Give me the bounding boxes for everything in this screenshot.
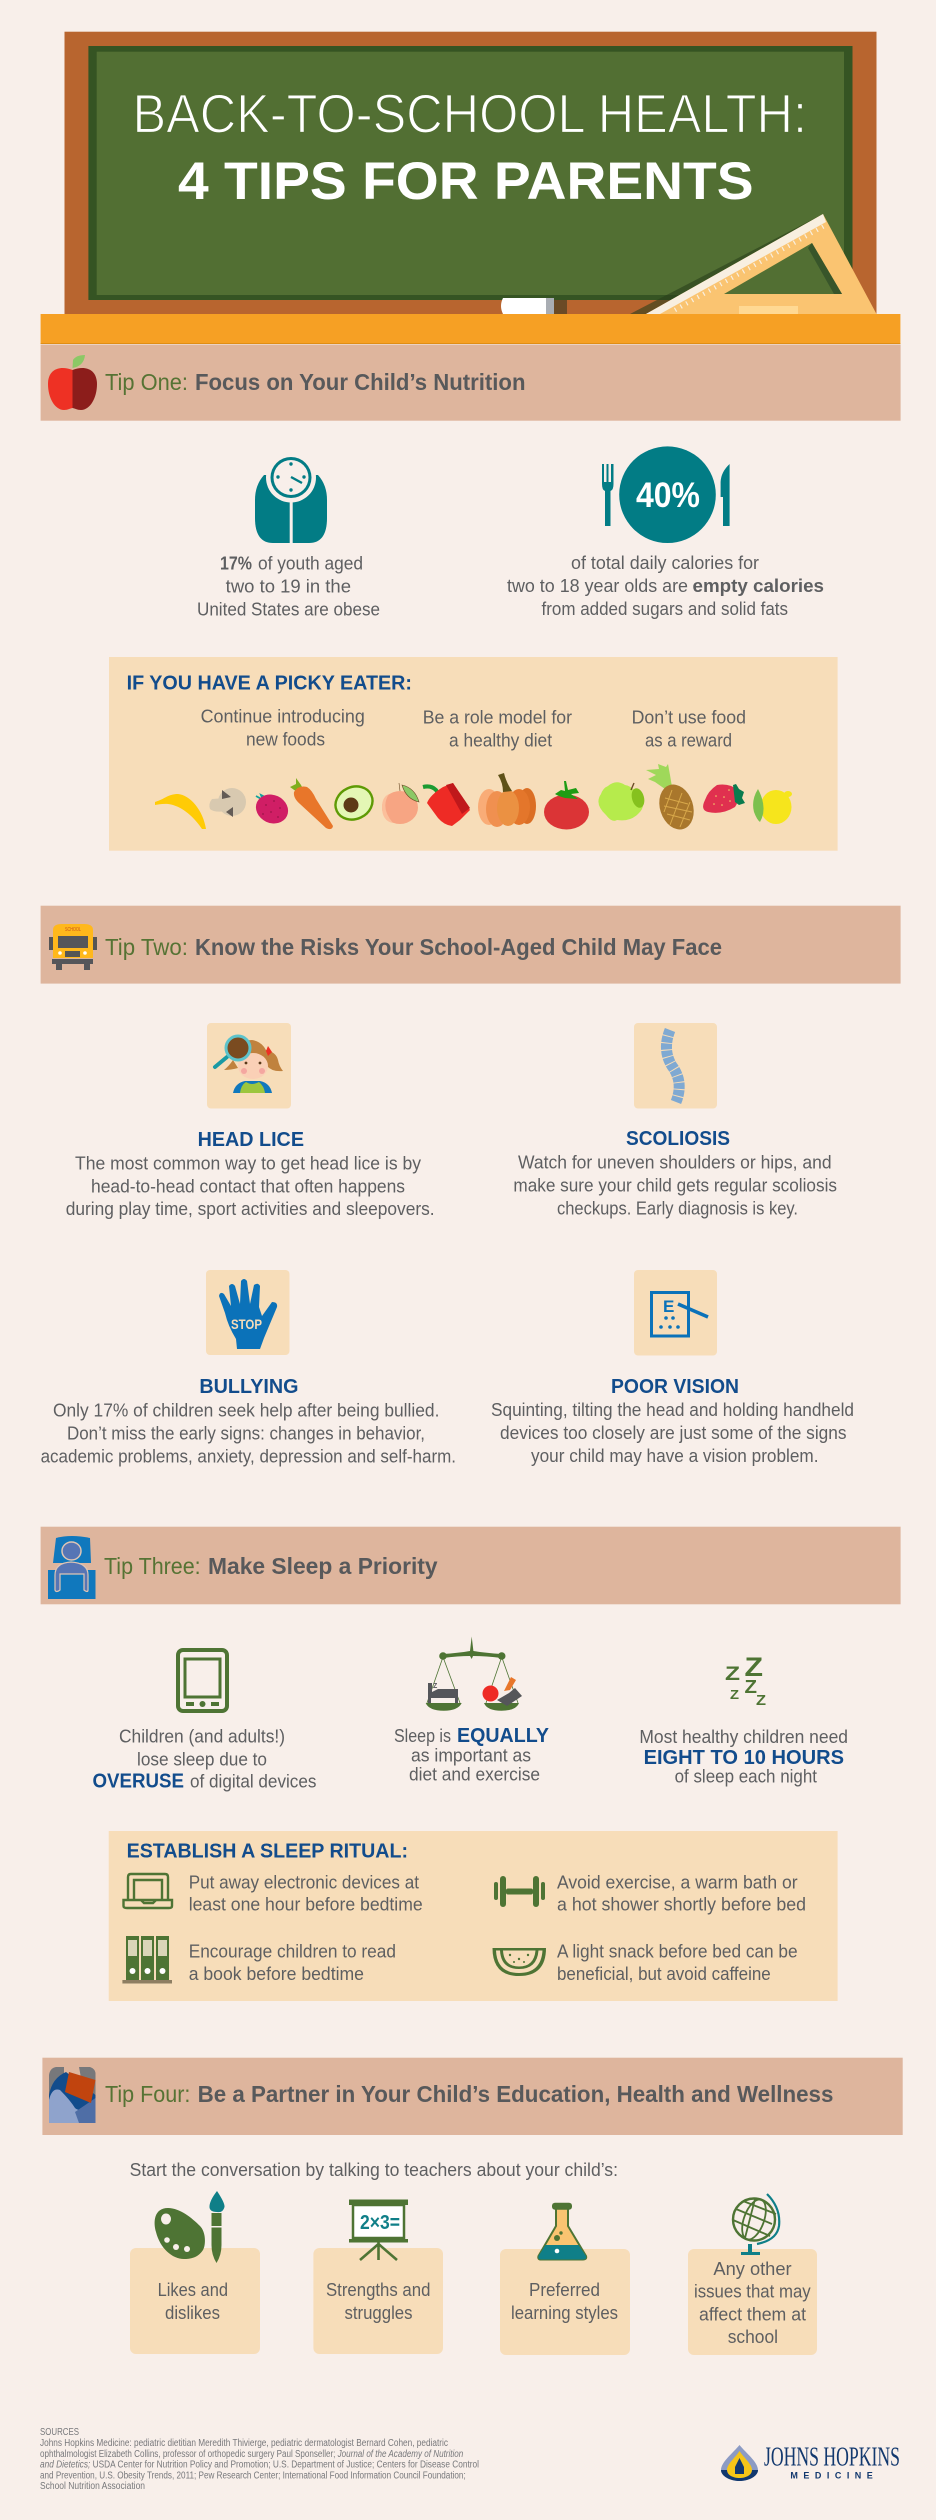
text: learning styles: learning styles xyxy=(511,2303,618,2323)
text: bullying xyxy=(41,1401,456,1466)
text: bullying: academic problems, anxiety, depression and self-harm. xyxy=(41,1446,456,1466)
card: scoliosis xyxy=(513,1023,837,1218)
text: head lice: during play time, sport activities and sleepovers. xyxy=(66,1199,435,1219)
icon: balance scale: Z xyxy=(433,1683,438,1690)
text: hours of sleep: EIGHT TO 10 HOURS xyxy=(644,1747,844,1769)
card: likes and dislikes xyxy=(130,2191,260,2354)
text: likes and dislikes: Likes and xyxy=(158,2280,228,2300)
icon: zzz: Z xyxy=(730,1687,739,1702)
icon: apple xyxy=(48,355,97,410)
sources: Johns Hopkins Medicine: pediatric dietitian Meredith Thivierge, pediatric dermatologist Bernard Cohen, pediatric xyxy=(40,2438,448,2449)
icon: balance scale xyxy=(426,1636,522,1711)
text: 40% of calories: from added sugars and solid fats xyxy=(542,599,788,619)
text: digital devices: lose sleep due to xyxy=(137,1750,267,1770)
heading: poor vision: POOR VISION xyxy=(611,1376,739,1398)
panel: tip two band xyxy=(41,906,901,984)
icon: stop hand xyxy=(206,1270,290,1355)
text: digital devices: Children (and adults!) xyxy=(119,1727,285,1747)
text: scoliosis: Watch for uneven shoulders or hips, and xyxy=(518,1153,832,1173)
card: head lice xyxy=(66,1023,435,1219)
text: poor vision xyxy=(491,1400,854,1466)
heading: bullying: BULLYING xyxy=(199,1376,298,1398)
sources xyxy=(40,2427,479,2492)
panel: sleep ritual xyxy=(109,1831,838,2001)
text: 40% of calories: of total daily calories for xyxy=(571,553,759,573)
icon: dumbbell xyxy=(494,1876,545,1907)
icon: weighing scale xyxy=(255,452,327,543)
text: 40% of calories: empty calories xyxy=(692,576,824,596)
heading: tip two: Know the Risks Your School-Aged Child May Face xyxy=(195,934,722,960)
logo: Johns Hopkins Medicine: MEDICINE xyxy=(790,2471,873,2481)
shelf xyxy=(41,314,900,344)
title: BACK-TO-SCHOOL HEALTH: xyxy=(132,84,807,145)
text: scoliosis xyxy=(513,1153,837,1218)
text: other issues: affect them at xyxy=(699,2304,806,2324)
text: 17% of youth: United States are obese xyxy=(197,599,380,619)
text: learning styles: Preferred xyxy=(529,2280,600,2300)
icon: globe xyxy=(733,2194,779,2255)
heading: tip four: Tip Four: xyxy=(105,2081,190,2107)
text: head lice xyxy=(66,1153,435,1219)
text: other issues: issues that may xyxy=(694,2282,811,2302)
text: strengths and struggles: Strengths and xyxy=(326,2280,430,2300)
icon: chalk xyxy=(501,298,567,314)
icon: eye chart xyxy=(634,1270,717,1356)
text: poor vision: your child may have a vision problem. xyxy=(531,1446,818,1466)
text: read a book xyxy=(189,1942,396,1984)
text: poor vision: Squinting, tilting the head and holding handheld xyxy=(491,1400,854,1420)
text: sleep equally xyxy=(394,1725,550,1785)
icon: plate with fork and knife: 40% xyxy=(636,476,700,515)
text: scoliosis: checkups. Early diagnosis is key. xyxy=(557,1198,798,1218)
intro text: start the conversation: Start the conversation by talking to teachers about your child’s: xyxy=(130,2160,618,2180)
text: learning styles xyxy=(511,2280,618,2323)
text: hours of sleep: of sleep each night xyxy=(675,1767,817,1787)
panel: picky eater xyxy=(109,657,838,851)
sources: and Prevention, U.S. Obesity Trends, 2011; Pew Research Center; International Food Information Council Foundation; xyxy=(40,2470,466,2481)
icon: laptop xyxy=(124,1874,172,1908)
title xyxy=(132,84,807,211)
heading: head lice: HEAD LICE xyxy=(198,1129,304,1151)
text: sleep equally: diet and exercise xyxy=(409,1765,540,1785)
stat: empty calories xyxy=(507,446,824,619)
text: head lice: The most common way to get head lice is by xyxy=(75,1153,421,1173)
text: sleep equally: Sleep is xyxy=(394,1726,451,1746)
heading: tip three: Tip Three: xyxy=(104,1553,201,1579)
tip: introducing foods: new foods xyxy=(246,730,325,750)
heading: scoliosis: SCOLIOSIS xyxy=(626,1128,730,1150)
icon: school bus xyxy=(49,924,97,970)
panel: tip four band xyxy=(42,2058,903,2135)
icon: plate with fork and knife xyxy=(602,446,730,543)
text: electronic devices xyxy=(189,1872,423,1915)
icon: presentation board: 2×3= xyxy=(360,2212,400,2234)
icon: zzz xyxy=(725,1652,766,1709)
title: 4 TIPS FOR PARENTS xyxy=(178,152,754,211)
sources: SOURCES xyxy=(40,2427,79,2438)
card: other issues xyxy=(688,2194,817,2355)
text: likes and dislikes: dislikes xyxy=(165,2303,220,2323)
text: 17% of youth: two to 19 in the xyxy=(226,577,351,597)
heading: tip one: Focus on Your Child’s Nutrition xyxy=(195,369,526,395)
logo: Johns Hopkins Medicine xyxy=(721,2442,900,2481)
heading: picky eater: IF YOU HAVE A PICKY EATER: xyxy=(127,672,412,694)
tip: role model xyxy=(423,708,572,751)
text: digital devices: OVERUSE xyxy=(92,1770,184,1792)
icons: row of fruit and vegetables xyxy=(155,764,792,834)
text: avoid exercise: a hot shower shortly before bed xyxy=(557,1895,806,1915)
text: strengths and struggles xyxy=(326,2280,430,2323)
panel: tip three band xyxy=(41,1527,901,1604)
icon: backpack xyxy=(49,2067,96,2123)
heading: tip two: Tip Two: xyxy=(105,934,188,960)
stat: hours of sleep xyxy=(639,1652,848,1787)
icon: shield xyxy=(721,2445,758,2481)
card: strengths and struggles xyxy=(313,2200,443,2354)
text: light snack xyxy=(557,1942,798,1984)
stat: obesity xyxy=(197,452,380,619)
icon: books xyxy=(122,1936,172,1984)
sources: ophthalmologist Elizabeth Collins, professor of orthopedic surgery Paul Sponseller; Journal of the Academy of Nutrition xyxy=(40,2449,464,2460)
text: avoid exercise: Avoid exercise, a warm bath or xyxy=(557,1872,798,1892)
text: read a book: a book before bedtime xyxy=(189,1964,364,1984)
tip: role model: a healthy diet xyxy=(449,731,552,751)
icon: school bus: SCHOOL xyxy=(65,927,81,933)
chalkboard header xyxy=(64,32,876,314)
text: light snack: beneficial, but avoid caffeine xyxy=(557,1964,771,1984)
text: hours of sleep xyxy=(639,1727,848,1787)
stat: sleep balance xyxy=(394,1636,550,1785)
text: head lice: head-to-head contact that often happens xyxy=(91,1176,405,1196)
icon: palette and brush xyxy=(155,2191,225,2263)
panel: tip one band xyxy=(41,344,901,421)
icon: flask xyxy=(538,2203,586,2260)
text: bullying: Don’t miss the early signs: changes in behavior, xyxy=(67,1424,425,1444)
text: likes and dislikes xyxy=(158,2280,228,2323)
text: sleep equally: as important as xyxy=(411,1746,531,1766)
card: bullying xyxy=(41,1270,456,1466)
text: other issues: Any other xyxy=(713,2259,792,2279)
text: scoliosis: make sure your child gets regular scoliosis xyxy=(513,1176,837,1196)
sources: School Nutrition Association xyxy=(40,2481,145,2492)
text: sleep equally: EQUALLY xyxy=(457,1725,550,1747)
heading: tip four: Be a Partner in Your Child’s Education, Health and Wellness xyxy=(198,2081,833,2107)
tip: food reward: as a reward xyxy=(645,731,732,751)
text: 17% of youth: of youth aged xyxy=(258,553,363,573)
icon: zzz: Z xyxy=(725,1664,741,1685)
icon: stop hand: STOP xyxy=(231,1316,262,1332)
text: electronic devices: Put away electronic devices at xyxy=(189,1872,419,1892)
icon: tablet xyxy=(178,1650,227,1711)
tip: food reward: Don’t use food xyxy=(632,708,746,728)
tip: introducing foods: Continue introducing xyxy=(201,707,365,727)
tip: food reward xyxy=(632,708,746,751)
icon: spine xyxy=(634,1023,717,1108)
icon: zzz: Z xyxy=(744,1652,763,1682)
heading: tip one: Tip One: xyxy=(105,369,188,395)
icon: zzz: Z xyxy=(744,1677,757,1697)
text: 40% of calories xyxy=(507,553,824,619)
heading: sleep ritual: ESTABLISH A SLEEP RITUAL: xyxy=(127,1841,408,1863)
tip: introducing foods xyxy=(201,707,365,750)
text: light snack: A light snack before bed can be xyxy=(557,1942,798,1962)
icon: eye chart: E xyxy=(663,1297,674,1316)
stat: digital devices xyxy=(92,1650,316,1792)
text: 17% of youth xyxy=(197,553,380,619)
text: bullying: Only 17% of children seek help after being bullied. xyxy=(53,1401,439,1421)
icon: watermelon slice xyxy=(492,1948,546,1976)
text: 17% of youth: 17% xyxy=(220,553,252,573)
text: other issues: school xyxy=(728,2327,778,2347)
card: learning styles xyxy=(500,2203,630,2355)
text: read a book: Encourage children to read xyxy=(189,1942,396,1962)
text: avoid exercise xyxy=(557,1872,806,1915)
text: digital devices xyxy=(92,1727,316,1792)
icon: set square ruler xyxy=(630,214,876,314)
text: 40% of calories: two to 18 year olds are xyxy=(507,576,688,596)
text: other issues xyxy=(694,2259,811,2347)
tip: role model: Be a role model for xyxy=(423,708,572,728)
text: hours of sleep: Most healthy children need xyxy=(639,1727,848,1747)
text: poor vision: devices too closely are just some of the signs xyxy=(500,1423,846,1443)
text: electronic devices: least one hour before bedtime xyxy=(189,1895,423,1915)
icon: girl with magnifying glass xyxy=(207,1023,291,1108)
text: strengths and struggles: struggles xyxy=(344,2303,412,2323)
icon: sleeping person xyxy=(48,1536,96,1599)
sources: and Dietetics; USDA Center for Nutrition Policy and Promotion; U.S. Department of Justice; Centers for Disease Control xyxy=(40,2460,479,2471)
text: digital devices: of digital devices xyxy=(190,1771,316,1791)
heading: tip three xyxy=(104,1553,438,1579)
heading: tip three: Make Sleep a Priority xyxy=(208,1553,438,1579)
icon: presentation board xyxy=(349,2200,408,2260)
card: poor vision xyxy=(491,1270,854,1466)
icon: zzz: Z xyxy=(756,1693,766,1709)
